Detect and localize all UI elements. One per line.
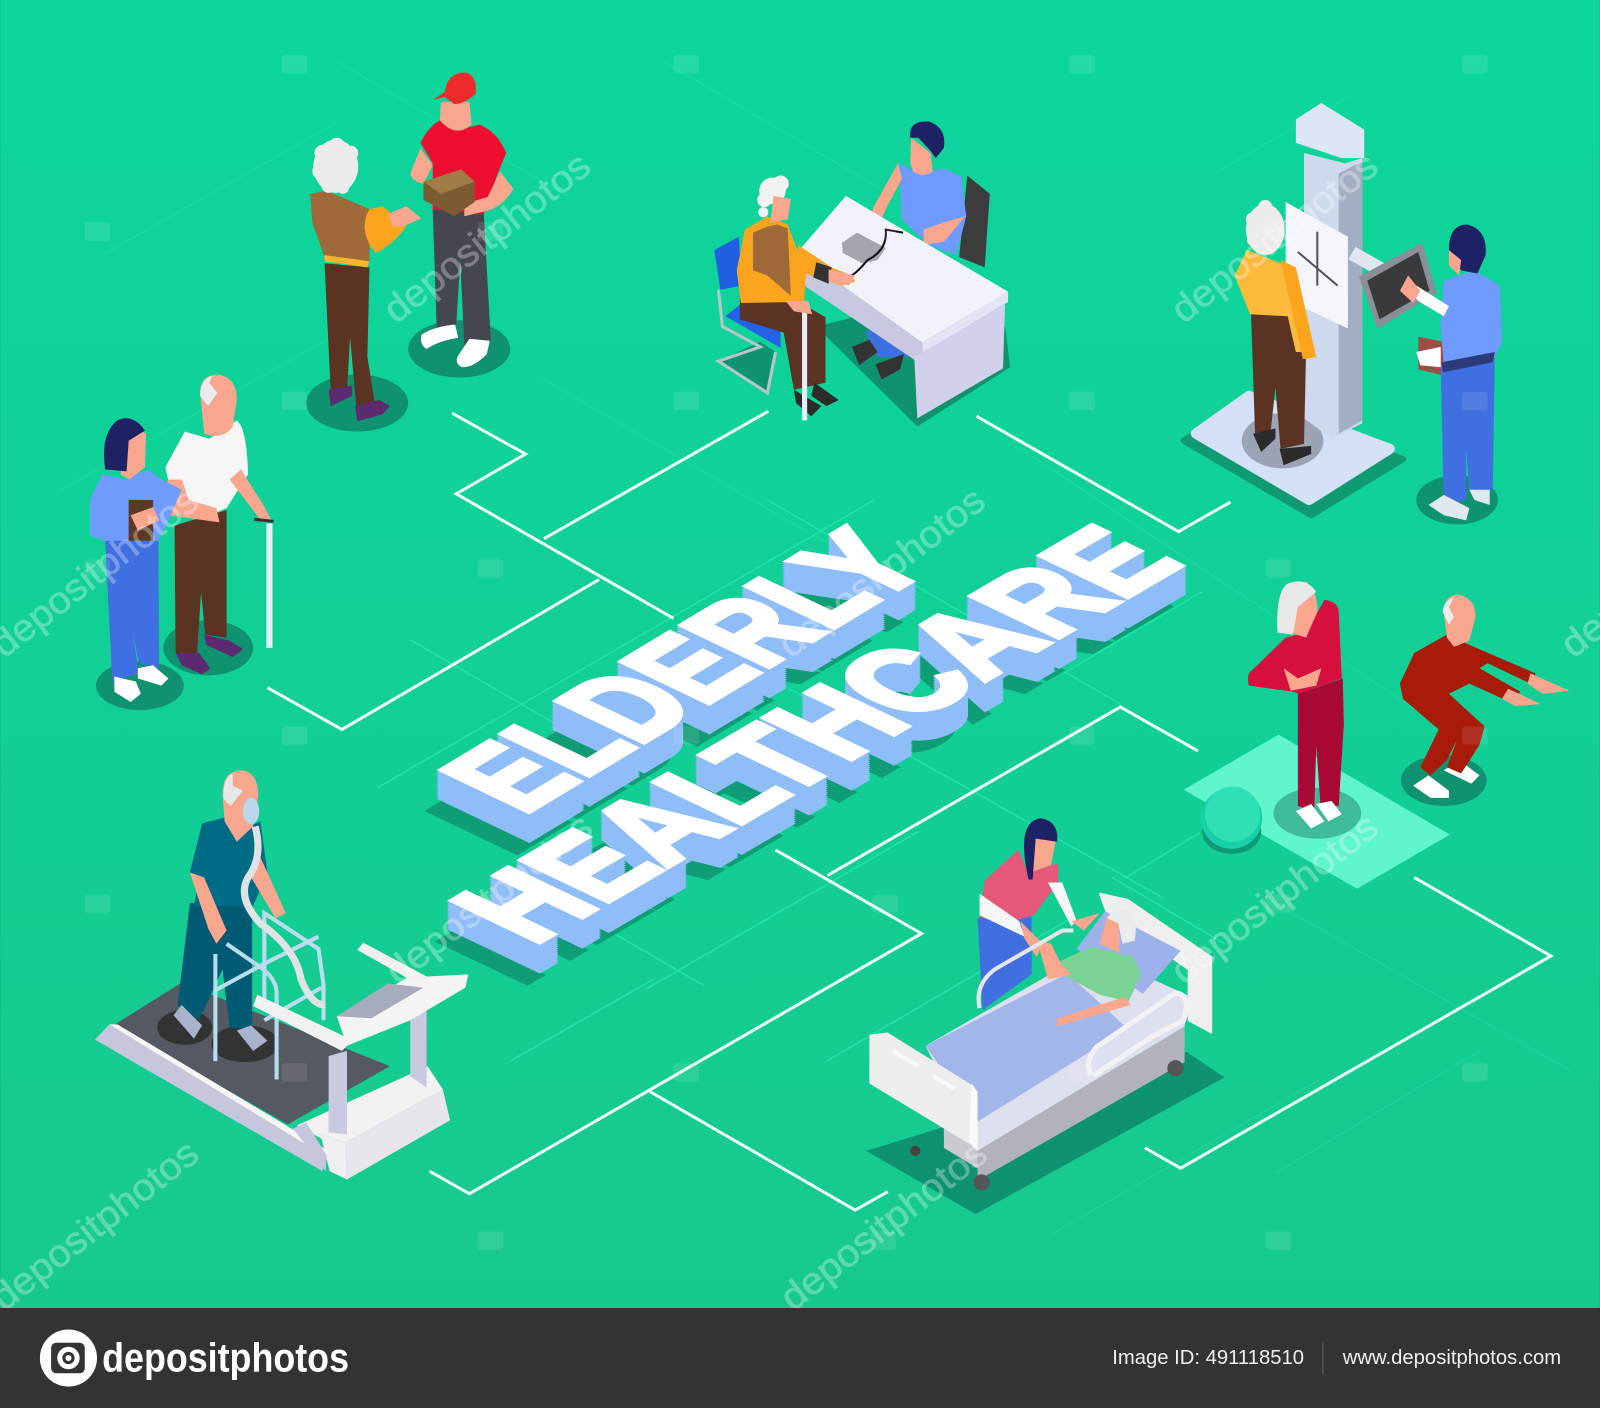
exercise mat [1184,735,1450,889]
word: HEALTHCARE: HEALTHCARE [419,525,1212,975]
treadmill deck [95,983,450,1179]
icon: camera logo [40,1329,97,1387]
word: HEALTHCARE: HEALTHCARE [419,527,1212,977]
word: ELDERLY: ELDERLY [409,531,962,847]
oxygen tube [244,826,325,1005]
foot shadows [157,1010,279,1062]
title: Elderly Healthcare [397,509,1212,999]
word: ELDERLY: ELDERLY [409,515,962,830]
word: ELDERLY: ELDERLY [409,541,962,857]
word: ELDERLY: ELDERLY [409,527,962,843]
x-ray detector panel [1286,202,1348,329]
watermarks: depositphotos [772,1131,995,1318]
scene: patient in hospital bed with nurse [866,818,1224,1214]
treadmill console [253,943,468,1135]
x-ray monitor [1352,243,1437,329]
word: HEALTHCARE: HEALTHCARE [419,511,1212,961]
word: ELDERLY: ELDERLY [409,519,962,834]
word: ELDERLY: ELDERLY [409,513,962,828]
desk shadow [816,306,1010,426]
word: ELDERLY: ELDERLY [409,525,962,841]
word: ELDERLY: ELDERLY [409,537,962,853]
watermarks: depositphotos [770,478,993,665]
bed shadow [866,1052,1224,1214]
word: ELDERLY: ELDERLY [409,539,962,855]
word: HEALTHCARE: HEALTHCARE [419,531,1212,981]
word: HEALTHCARE: HEALTHCARE [419,529,1212,979]
patient [1037,909,1141,1026]
old man [158,374,274,675]
word: HEALTHCARE: HEALTHCARE [419,538,1212,987]
x-ray column [1296,103,1364,439]
watermarks: depositphotos [1163,144,1386,331]
gym ball [1201,787,1262,854]
nurse at bed [978,818,1100,1010]
word: HEALTHCARE: HEALTHCARE [419,521,1212,971]
hospital bed [910,894,1211,1191]
image id: Image ID: 491118510 [1112,1347,1304,1369]
squatting man [1400,595,1569,806]
footer bar [0,1308,1600,1408]
walking frame [215,913,324,1079]
patient on treadmill [174,770,286,1051]
old woman at x-ray [1235,200,1316,465]
old woman from behind [306,138,421,432]
website url: www.depositphotos.com [1342,1347,1561,1369]
scene: blood pressure check at desk [714,121,1010,426]
word: HEALTHCARE: HEALTHCARE [419,519,1212,969]
word: HEALTHCARE: HEALTHCARE [419,517,1212,967]
blue chair [714,237,781,393]
word: HEALTHCARE: HEALTHCARE [419,536,1212,985]
watermarks: depositphotos [377,805,600,992]
doctor [852,121,990,380]
word: ELDERLY: ELDERLY [409,517,962,832]
figures: old woman receiving a delivery [306,72,513,432]
word: HEALTHCARE: HEALTHCARE [419,515,1212,965]
nurse [90,418,184,710]
connector lines [267,411,1551,1210]
word: ELDERLY: ELDERLY [409,535,962,851]
delivery man [408,72,513,378]
watermarks: depositphotos [1163,805,1386,992]
bed rails and footboard [869,931,1186,1151]
title shadows: ELDERLY [397,554,949,869]
title shadows: HEALTHCARE [407,550,1200,999]
word: ELDERLY: ELDERLY [409,523,962,839]
word: HEALTHCARE: HEALTHCARE [419,509,1212,959]
word: HEALTHCARE: HEALTHCARE [419,533,1212,983]
word: ELDERLY: ELDERLY [409,521,962,837]
logo wordmark: depositphotos [102,1334,349,1380]
scene: exercise mat [1184,581,1569,889]
watermarks: depositphotos [375,144,598,331]
word: ELDERLY: ELDERLY [409,533,962,849]
word: ELDERLY: ELDERLY [409,529,962,845]
word: HEALTHCARE: HEALTHCARE [419,513,1212,963]
x-ray base [1184,396,1403,515]
desk [797,196,1008,418]
scene: treadmill with oxygen patient [95,770,468,1179]
exercising woman [1248,581,1361,839]
word: HEALTHCARE: HEALTHCARE [419,523,1212,973]
figures: nurse helping old man with cane [90,374,274,710]
scene: x-ray machine [1184,103,1502,524]
doctor at x-ray [1400,224,1502,524]
blood pressure monitor [837,230,903,278]
seated old woman [737,175,855,420]
